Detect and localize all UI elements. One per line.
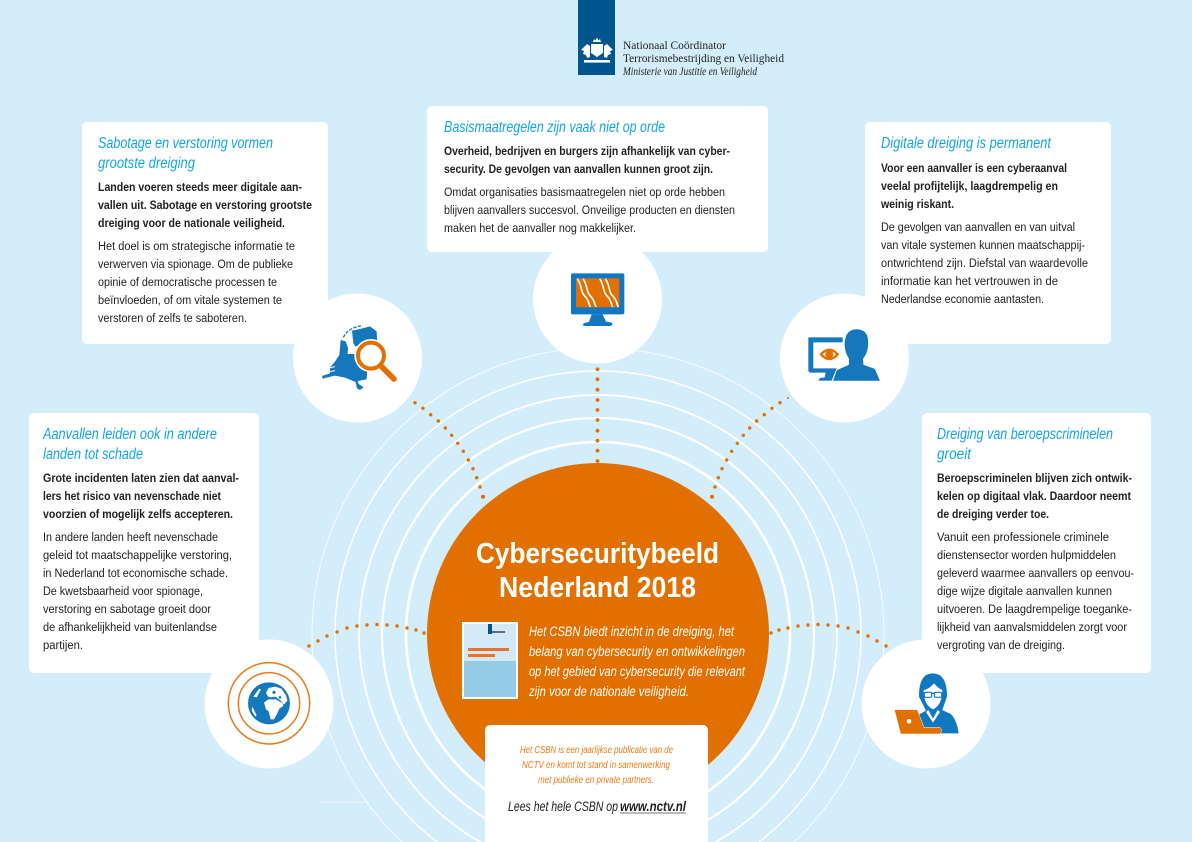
- panel: andere landen: Grote incidenten laten zien dat aanval-: [43, 471, 239, 485]
- logo: Rijksoverheid: Ministerie van Justitie en Veiligheid: [622, 66, 757, 78]
- callout: publication: met publieke en private partners.: [538, 775, 654, 786]
- icon: coat of arms: [581, 38, 613, 63]
- heading: central title: Cybersecuritybeeld: [476, 538, 719, 570]
- panel: andere landen: landen tot schade: [43, 446, 143, 463]
- callout: publication: [485, 725, 708, 842]
- icon: person with eye on screen: [808, 329, 880, 381]
- panel: basismaatregelen: security. De gevolgen van aanvallen kunnen groot zijn.: [444, 162, 713, 176]
- panel: andere landen: Aanvallen leiden ook in andere: [42, 426, 217, 443]
- text: intro: zijn voor de nationale veiligheid.: [528, 684, 689, 699]
- panel: sabotage: [82, 122, 328, 344]
- heading: central title: Nederland 2018: [499, 572, 696, 604]
- panel: basismaatregelen: Overheid, bedrijven en burgers zijn afhankelijk van cyber-: [444, 144, 730, 158]
- panel: sabotage: Sabotage en verstoring vormen: [98, 135, 273, 152]
- central orange circle: [427, 463, 769, 805]
- panel: sabotage: beïnvloeden, of om vitale systemen te: [98, 293, 282, 307]
- panel: andere landen: partijen.: [43, 638, 83, 652]
- panel: basismaatregelen: blijven aanvallers succesvol. Onveilige producten en diensten: [444, 203, 735, 217]
- panel: digitale dreiging: Digitale dreiging is permanent: [881, 135, 1052, 152]
- panel: digitale dreiging: ontwrichtend zijn. Diefstal van waardevolle: [881, 256, 1088, 270]
- panel: sabotage: verwerven via spionage. Om de publieke: [98, 257, 293, 271]
- logo: Rijksoverheid: Terrorismebestrijding en Veiligheid: [623, 53, 784, 65]
- panel: digitale dreiging: informatie kan het vertrouwen in de: [881, 274, 1058, 288]
- panel: andere landen: [29, 413, 259, 673]
- panel: basismaatregelen: Basismaatregelen zijn vaak niet op orde: [444, 119, 665, 136]
- icon: hacker with laptop: [894, 673, 959, 734]
- panel: andere landen: geleid tot maatschappelijke verstoring,: [43, 548, 232, 562]
- panel: beroepscriminelen: dige wijze digitale aanvallen kunnen: [937, 584, 1112, 598]
- panel: beroepscriminelen: lijkheid van aanvalsmiddelen zorgt voor: [937, 620, 1127, 634]
- panel: sabotage: verstoren of zelfs te saboteren.: [98, 311, 247, 325]
- panel: beroepscriminelen: uitvoeren. De laagdrempelige toeganke-: [937, 602, 1132, 616]
- text: intro: belang van cybersecurity en ontwikkelingen: [529, 644, 745, 659]
- panel: beroepscriminelen: Beroepscriminelen blijven zich ontwik-: [937, 471, 1132, 485]
- icon: report cover: [462, 622, 518, 699]
- callout: publication: Het CSBN is een jaarlijkse publicatie van de: [520, 745, 673, 756]
- panel: sabotage: vallen uit. Sabotage en verstoring grootste: [98, 198, 312, 212]
- text: intro: op het gebied van cybersecurity die relevant: [529, 664, 746, 679]
- panel: beroepscriminelen: dienstensector worden hulpmiddelen: [937, 548, 1116, 562]
- panel: andere landen: verstoring en sabotage groeit door: [43, 602, 211, 616]
- panel: digitale dreiging: Nederlandse economie aantasten.: [881, 292, 1044, 306]
- panel: andere landen: voorzien of mogelijk zelfs accepteren.: [43, 507, 233, 521]
- panel: basismaatregelen: maken het de aanvaller nog makkelijker.: [444, 221, 636, 235]
- icon: globe with rings: [228, 663, 310, 744]
- panel: beroepscriminelen: de dreiging verder toe.: [937, 507, 1049, 521]
- panel: andere landen: lers het risico van nevenschade niet: [43, 489, 221, 503]
- panel: sabotage: Het doel is om strategische informatie te: [98, 239, 295, 253]
- panel: beroepscriminelen: geleverd waarmee aanvallers op eenvou-: [937, 566, 1134, 580]
- panel: digitale dreiging: veelal profijtelijk, laagdrempelig en: [881, 179, 1058, 193]
- panel: andere landen: In andere landen heeft nevenschade: [43, 530, 218, 544]
- logo: Rijksoverheid: [578, 0, 784, 78]
- panel: sabotage: opinie of democratische processen te: [98, 275, 277, 289]
- icon: monitor: [571, 273, 624, 326]
- text: intro: Het CSBN biedt inzicht in de dreiging, het: [529, 624, 735, 639]
- panel: sabotage: grootste dreiging: [98, 155, 195, 172]
- panel: digitale dreiging: van vitale systemen kunnen maatschappij-: [881, 238, 1085, 252]
- callout: publication: Lees het hele CSBN op: [508, 799, 618, 814]
- panel: digitale dreiging: weinig riskant.: [880, 197, 954, 211]
- panel: andere landen: de afhankelijkheid van buitenlandse: [43, 620, 217, 634]
- panel: andere landen: in Nederland tot economische schade.: [43, 566, 228, 580]
- panel: beroepscriminelen: kelen op digitaal vlak. Daardoor neemt: [937, 489, 1131, 503]
- white icon circles: [204, 234, 990, 768]
- panel: beroepscriminelen: Vanuit een professionele criminele: [937, 530, 1109, 544]
- panel: beroepscriminelen: [922, 413, 1151, 673]
- panel: digitale dreiging: De gevolgen van aanvallen en van uitval: [881, 220, 1075, 234]
- panel: beroepscriminelen: groeit: [937, 446, 972, 463]
- icon: Netherlands with magnifier: [322, 326, 394, 390]
- panel: sabotage: Landen voeren steeds meer digitale aan-: [98, 180, 302, 194]
- logo: Rijksoverheid: Nationaal Coördinator: [623, 40, 726, 52]
- panel: beroepscriminelen: vergroting van de dreiging.: [937, 638, 1065, 652]
- callout: publication: NCTV en komt tot stand in samenwerking: [522, 760, 670, 771]
- concentric rings: [312, 348, 884, 842]
- dotted connectors: [307, 367, 888, 648]
- panel: basismaatregelen: Omdat organisaties basismaatregelen niet op orde hebben: [444, 185, 725, 199]
- panel: sabotage: dreiging voor de nationale veiligheid.: [98, 216, 285, 230]
- heading: central title: [476, 538, 719, 604]
- panel: beroepscriminelen: Dreiging van beroepscriminelen: [937, 426, 1113, 443]
- panel: basismaatregelen: [427, 106, 768, 252]
- callout: publication: www.nctv.nl: [620, 799, 686, 814]
- panel: andere landen: De kwetsbaarheid voor spionage,: [43, 584, 203, 598]
- text: intro: [528, 624, 746, 699]
- panel: digitale dreiging: [865, 122, 1111, 344]
- panel: digitale dreiging: Voor een aanvaller is een cyberaanval: [881, 161, 1067, 175]
